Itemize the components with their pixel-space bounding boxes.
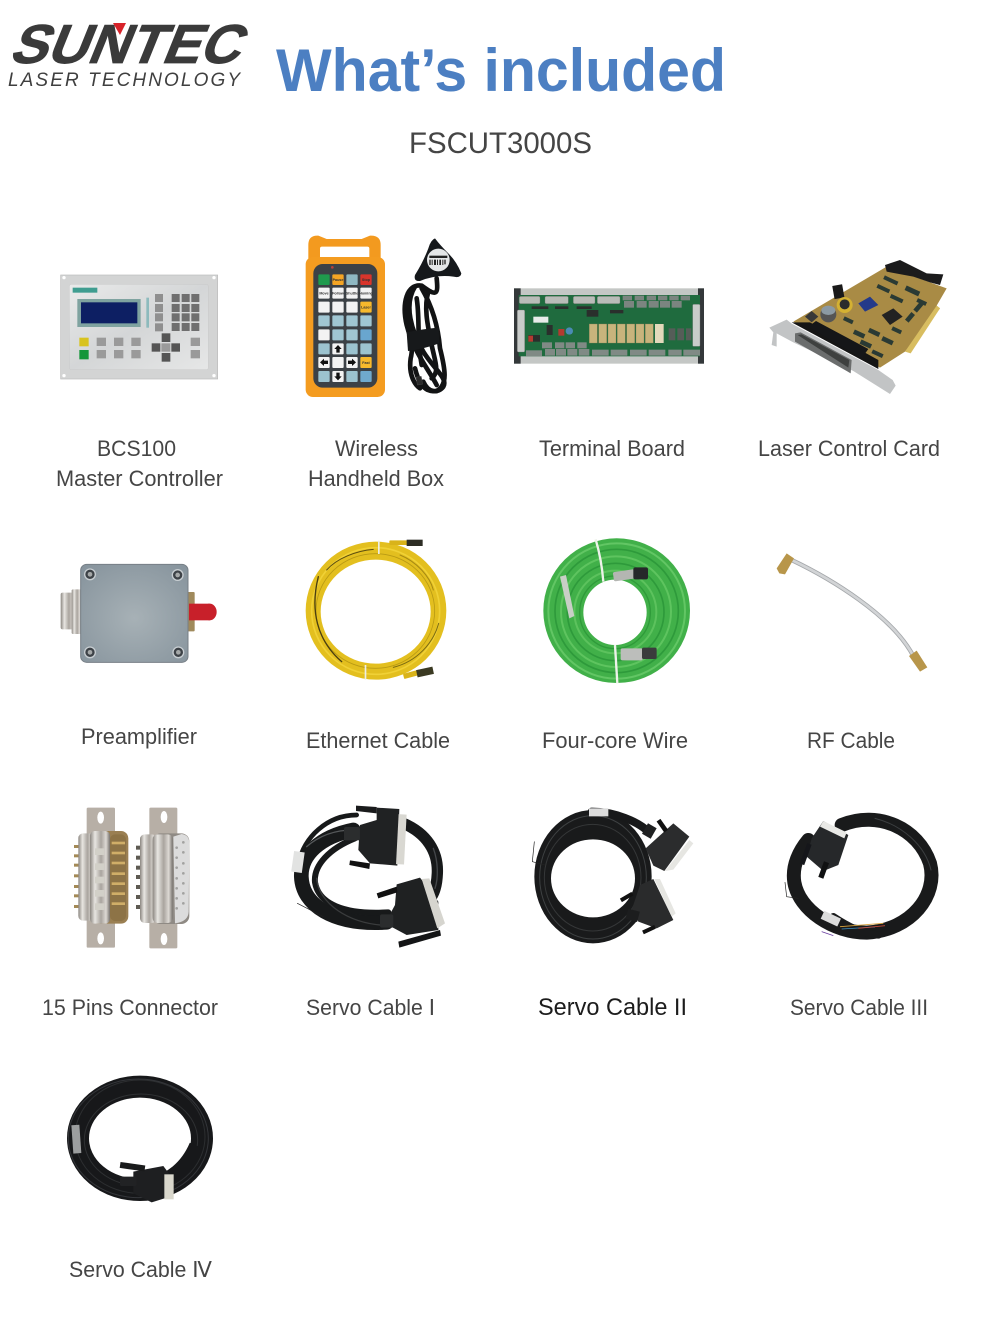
item: Servo Cable I: [291, 806, 445, 1020]
label: Preamplifier: [81, 724, 197, 749]
icon: orange handheld remote with receiver: [306, 236, 461, 397]
label: Servo Cable II: [538, 994, 687, 1021]
icon: black cable coil with one plug: [68, 1079, 208, 1202]
item: Preamplifier: [61, 564, 217, 749]
icon: black cable with two D-sub plugs: [291, 806, 445, 948]
item: BCS100 Master Controller: [56, 275, 223, 491]
label: Master Controller: [56, 466, 223, 491]
label: Handheld Box: [308, 466, 444, 491]
label: Terminal Board: [539, 436, 685, 461]
icon: orange handheld remote with receiver: Follow: [332, 292, 344, 296]
subtitle: model name: FSCUT3000S: [409, 127, 592, 160]
icon: D-sub connector pair: [74, 808, 189, 948]
icon: orange handheld remote with receiver: Laser: [361, 306, 371, 310]
icon: orange handheld remote with receiver: Shuttle: [346, 292, 358, 296]
label: BCS100: [97, 436, 176, 461]
item: Laser Control Card: [758, 260, 947, 461]
logo: Suntec Laser Technology: LASER TECHNOLOGY: [8, 70, 241, 91]
icon: coaxial cable with gold ends: [777, 553, 927, 672]
item: Four-core Wire: [542, 538, 690, 753]
icon: orange handheld remote with receiver: Fast: [362, 361, 371, 365]
icon: green cable coil: [543, 538, 690, 683]
icon: orange handheld remote with receiver: Stop: [362, 278, 371, 282]
item: Servo Cable III: [785, 818, 932, 1020]
item: 15 Pins Connector: [42, 808, 218, 1020]
icon: gold PCI control card: [769, 260, 947, 394]
icon: orange handheld remote with receiver: Move: [319, 292, 329, 296]
label: [308, 436, 444, 491]
icon: orange handheld remote with receiver: Pause: [333, 278, 343, 282]
icon: orange handheld remote with receiver: Homing: [359, 292, 373, 296]
label: RF Cable: [807, 728, 895, 753]
label: 15 Pins Connector: [42, 995, 218, 1020]
item: Ethernet Cable: [306, 540, 450, 753]
icon: green terminal board: [514, 288, 704, 364]
icon: yellow ethernet cable coil: [306, 540, 446, 680]
label: Servo Cable Ⅰ: [306, 995, 435, 1020]
label: Servo Cable III: [790, 995, 928, 1020]
icon: black cable coil with two plugs: [532, 808, 693, 943]
item: Servo Cable IV: [68, 1079, 213, 1282]
label: Four-core Wire: [542, 728, 688, 753]
label: Laser Control Card: [758, 436, 940, 461]
label: Wireless: [335, 436, 418, 461]
label: Servo Cable Ⅳ: [69, 1257, 213, 1282]
icon: black cable with one plug and loose wires: [785, 818, 932, 936]
title: What’s included: [276, 37, 726, 104]
label: [56, 436, 223, 491]
icon: controller panel: [61, 275, 218, 379]
label: Ethernet Cable: [306, 728, 450, 753]
item: Servo Cable II: [532, 808, 693, 1021]
item: Terminal Board: [514, 288, 704, 461]
item: RF Cable: [777, 553, 927, 753]
item: Wireless Handheld Box: [306, 236, 461, 491]
icon: preamplifier box: [61, 564, 217, 662]
logo: Suntec Laser Technology: SUNTEC: [3, 14, 258, 75]
